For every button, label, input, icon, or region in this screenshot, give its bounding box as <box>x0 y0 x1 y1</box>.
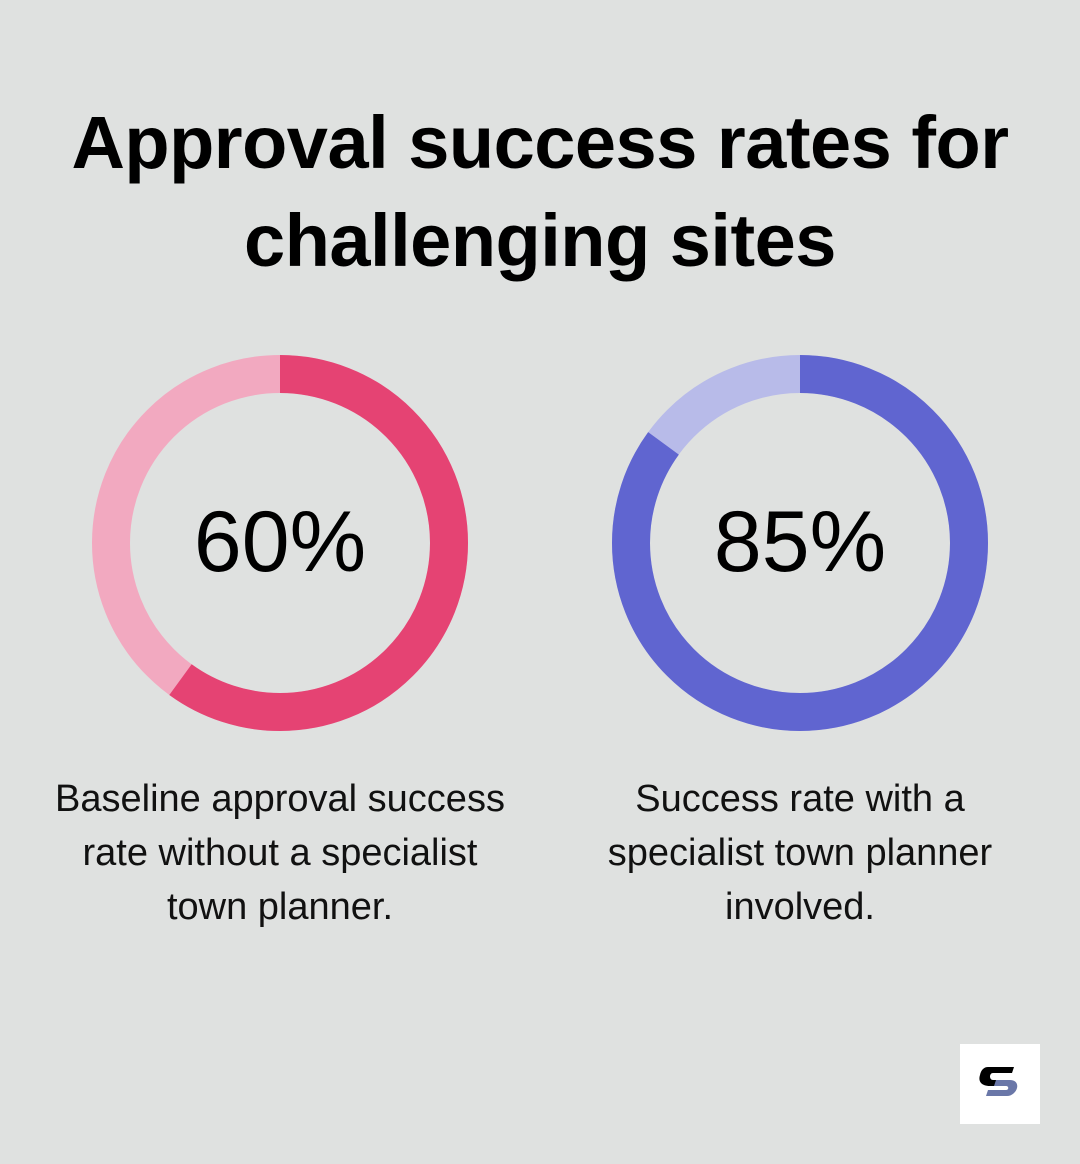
title: challenging sites <box>244 199 836 282</box>
caption right: Success rate with a <box>635 778 965 820</box>
caption left <box>55 778 505 928</box>
donut: 85%: 85% <box>714 494 886 590</box>
donut: 60% <box>111 374 449 712</box>
title: Approval success rates for <box>71 101 1009 184</box>
caption left: town planner. <box>167 886 393 928</box>
caption right: involved. <box>725 886 875 928</box>
caption right <box>608 778 992 928</box>
donut: 60%: 60% <box>194 494 366 590</box>
donut: 85% <box>631 374 969 712</box>
caption right: specialist town planner <box>608 832 992 874</box>
caption left: rate without a specialist <box>82 832 477 874</box>
title <box>71 101 1009 282</box>
logo <box>960 1044 1040 1124</box>
caption left: Baseline approval success <box>55 778 505 820</box>
